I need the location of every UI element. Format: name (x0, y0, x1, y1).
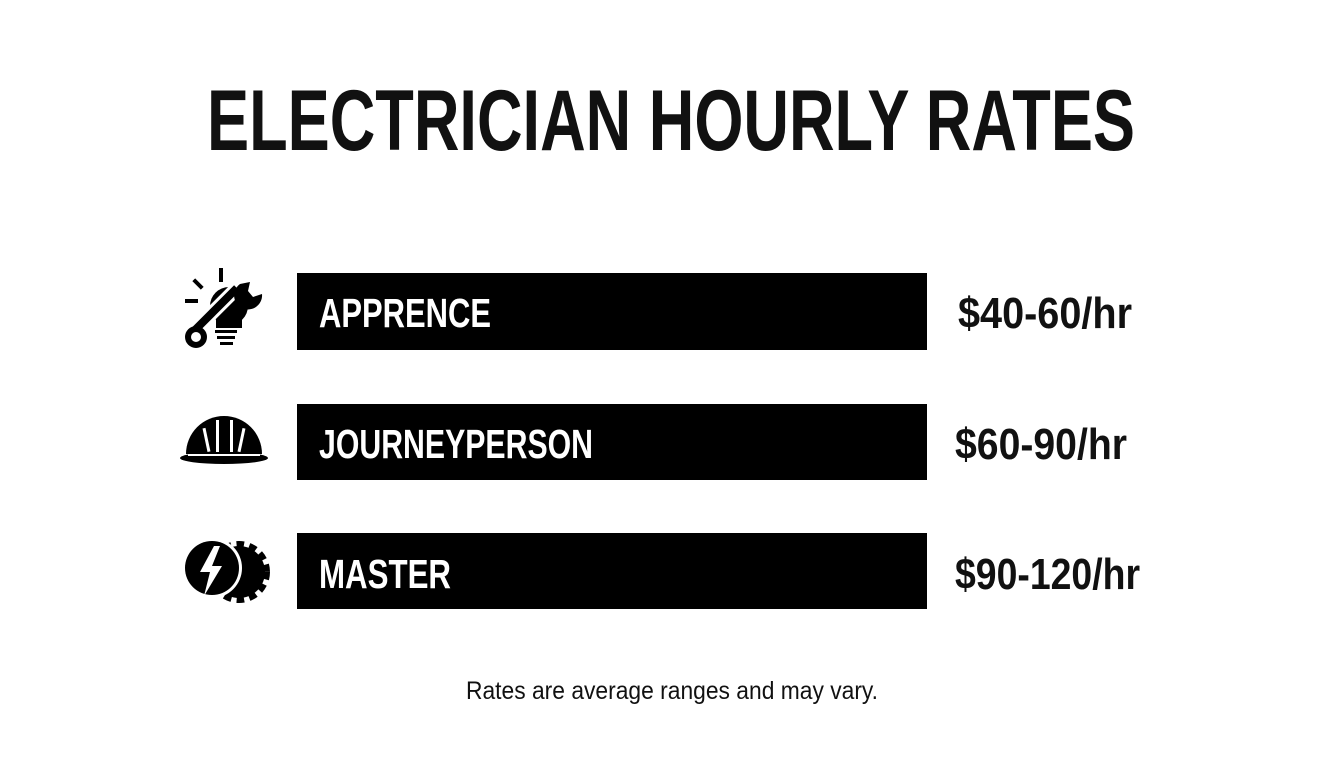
label: MASTER (319, 551, 451, 597)
icon: hard hat (180, 416, 268, 464)
bar (297, 404, 927, 480)
footnote: Rates are average ranges and may vary. (466, 677, 878, 705)
row: apprentice (185, 268, 1132, 350)
price: $40-60/hr (958, 289, 1132, 338)
row: master (182, 533, 1140, 609)
label: APPRENCE (319, 290, 491, 336)
icon: bulb and wrench (185, 268, 262, 348)
row: journeyperson (180, 404, 1127, 480)
price: $90-120/hr (955, 550, 1140, 599)
label: JOURNEYPERSON (319, 421, 593, 467)
bar (297, 273, 927, 350)
icon: bolt and gear (182, 538, 265, 598)
bar (297, 533, 927, 609)
price: $60-90/hr (955, 420, 1127, 469)
